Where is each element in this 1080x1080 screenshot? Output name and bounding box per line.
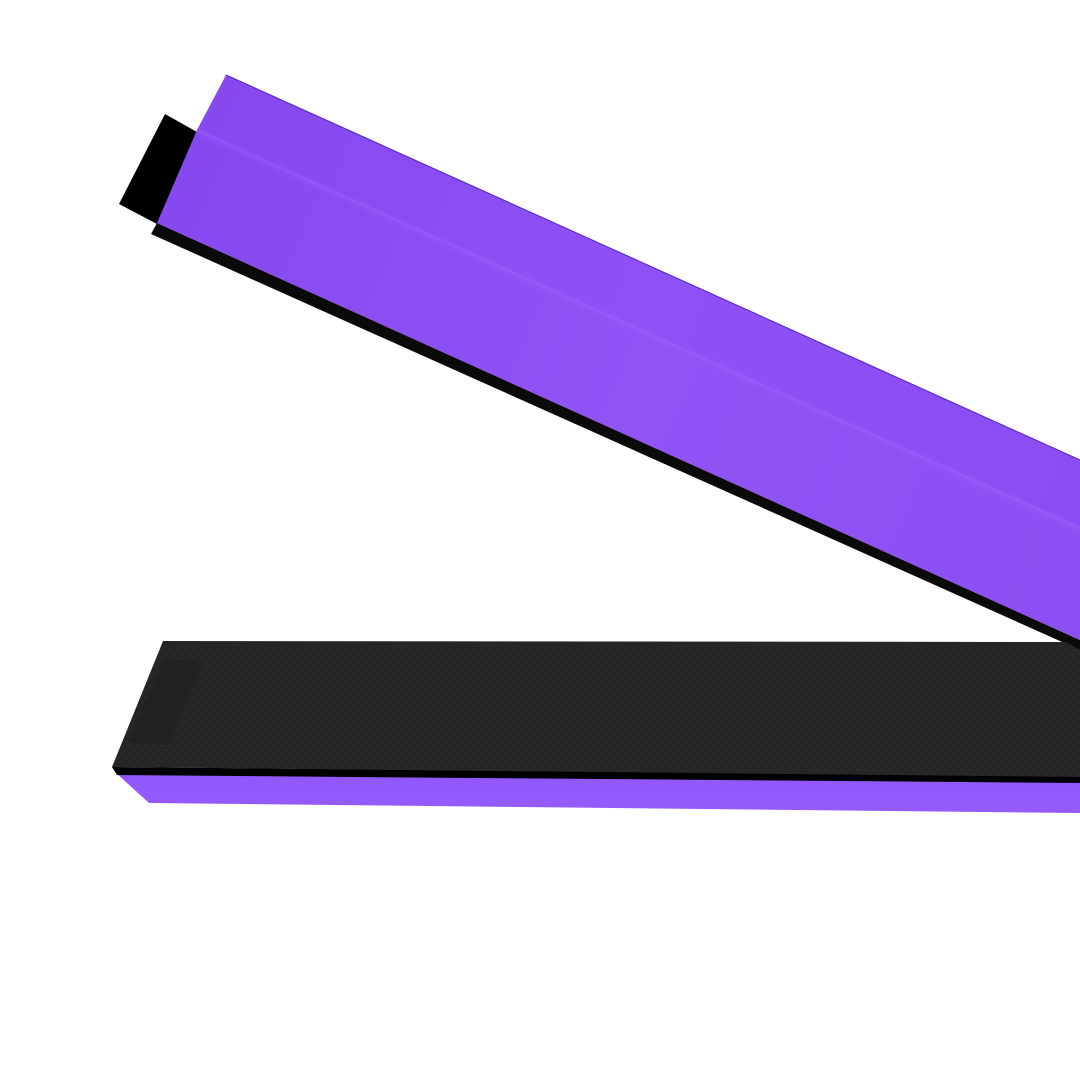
black underside strip xyxy=(151,223,1080,650)
darker fastener patch xyxy=(128,658,203,745)
crease highlight xyxy=(197,131,1080,529)
textured black top face xyxy=(112,641,1080,777)
black end tab xyxy=(119,114,197,224)
purple front face xyxy=(157,130,1080,640)
lower beam xyxy=(112,641,1080,813)
black edge strip xyxy=(112,767,1080,783)
purple side face xyxy=(116,773,1080,813)
purple top face xyxy=(197,75,1080,528)
dark top edge xyxy=(226,75,1080,460)
upper beam xyxy=(119,75,1080,650)
